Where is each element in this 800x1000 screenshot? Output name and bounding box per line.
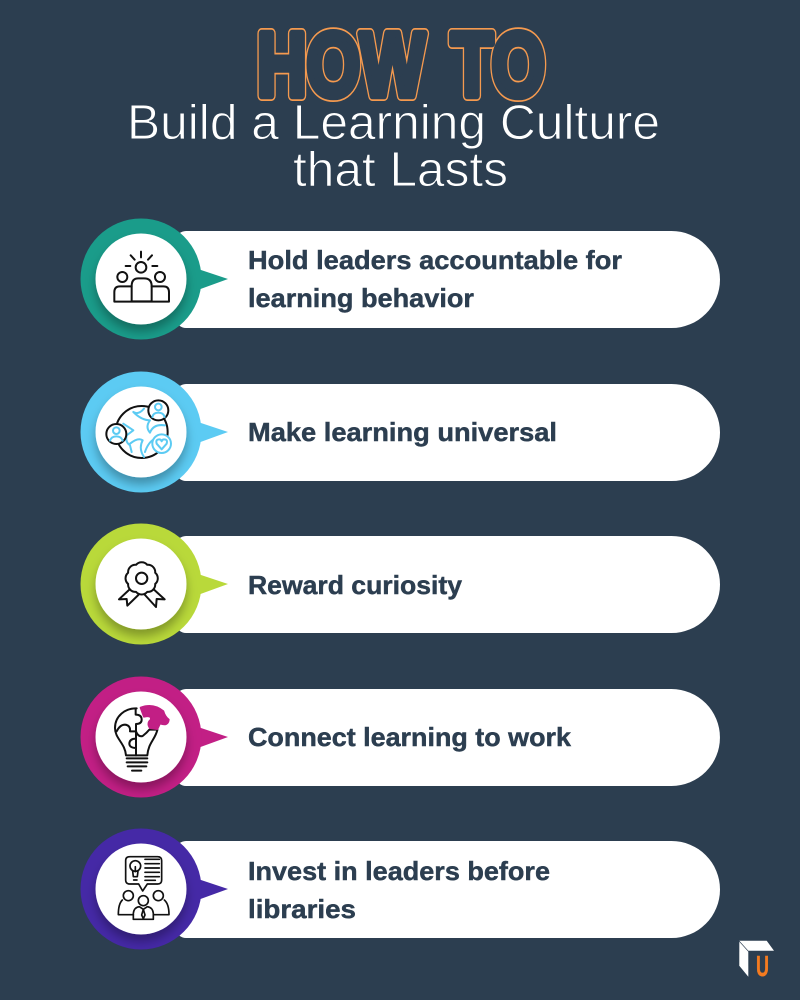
pill: step 3 <box>176 536 720 633</box>
heading: how to: HOW <box>257 16 425 116</box>
label: step 1: learning behavior <box>248 283 474 313</box>
logo <box>739 941 774 983</box>
panel: step 2 <box>80 372 720 492</box>
heading: how to: TO <box>451 16 545 116</box>
badge: step 1 <box>80 218 228 340</box>
subtitle line 1: Build a Learning Culture <box>127 96 660 150</box>
label: step 5: Invest in leaders before <box>248 856 550 886</box>
icon: leaders group <box>114 252 169 302</box>
pill: step 1 <box>176 231 720 328</box>
label: step 1: Hold leaders accountable for <box>248 245 622 275</box>
badge: step 4 <box>80 676 228 798</box>
label: step 4: Connect learning to work <box>248 722 572 752</box>
panel: step 4 <box>80 676 720 798</box>
label: step 5: libraries <box>248 894 356 924</box>
subtitle line 2: that Lasts <box>293 143 508 197</box>
icon: globe with people <box>106 400 171 458</box>
panel: step 5 <box>80 828 720 950</box>
icon: award rosette <box>119 562 165 607</box>
icon: puzzle light bulb <box>115 706 169 771</box>
heading: how to: HOW <box>257 16 425 116</box>
logo: U <box>756 951 769 983</box>
heading: how to: TO <box>451 16 545 116</box>
panel: step 3 <box>80 524 720 644</box>
panel: step 1 <box>80 218 720 340</box>
label: step 5 <box>248 856 550 924</box>
pill: step 5 <box>176 841 720 938</box>
badge: step 2 <box>80 372 228 492</box>
label: step 1 <box>248 245 622 313</box>
title block <box>127 16 660 197</box>
label: step 2: Make learning universal <box>248 417 557 447</box>
pill: step 2 <box>176 384 720 481</box>
badge: step 5 <box>80 828 228 950</box>
badge: step 3 <box>80 524 228 644</box>
icon: team with idea bubble <box>118 857 169 919</box>
label: step 3: Reward curiosity <box>248 570 463 600</box>
pill: step 4 <box>176 689 720 786</box>
